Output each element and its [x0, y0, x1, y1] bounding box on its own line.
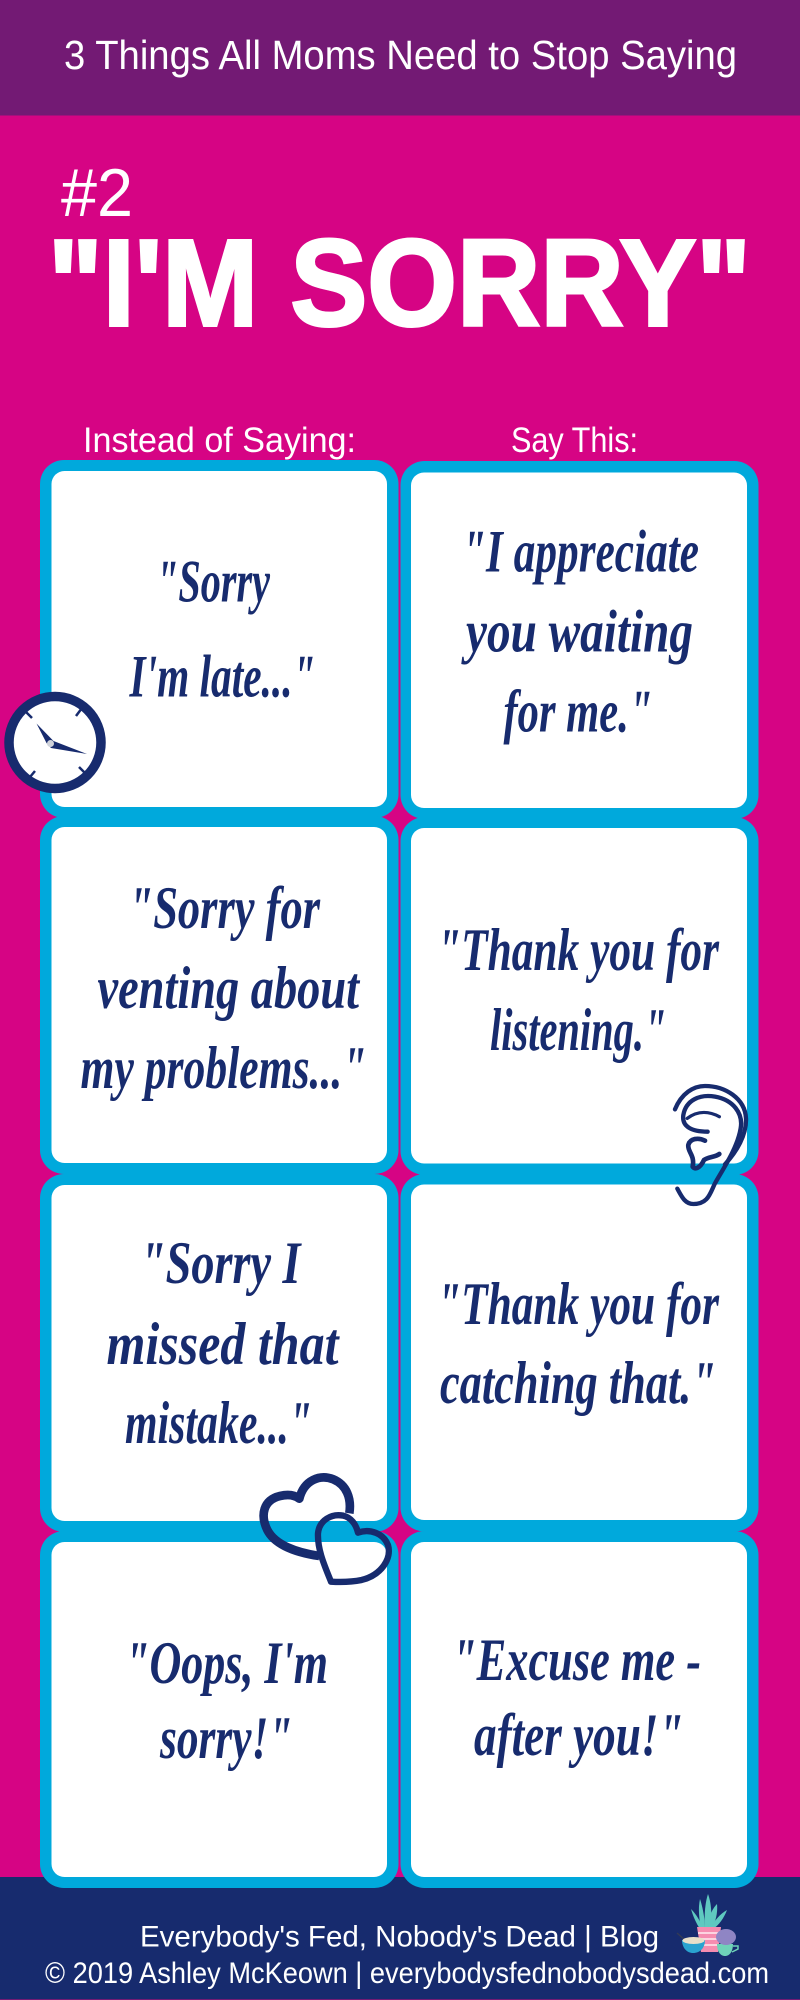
- icon: clock: [9, 696, 101, 788]
- column heading: instead of saying: Instead of Saying:: [83, 421, 356, 460]
- card: sorry for venting: "Sorry for: [128, 875, 320, 941]
- footer blog name: Everybody's Fed, Nobody's Dead | Blog: [140, 1920, 659, 1954]
- card: I appreciate you waiting for me: you waiting: [461, 598, 693, 664]
- card: excuse me after you: after you!": [474, 1702, 684, 1768]
- card: sorry I missed that mistake: [40, 1174, 398, 1532]
- card: thank you for listening: listening.": [490, 997, 666, 1063]
- pink pot: [697, 1927, 721, 1952]
- card: sorry I'm late: [40, 460, 398, 818]
- main heading: "I'M SORRY": [48, 216, 751, 352]
- front heart: [318, 1515, 389, 1582]
- card: sorry for venting: [40, 816, 398, 1174]
- card: sorry I'm late: "Sorry: [156, 548, 270, 614]
- teal cup with lavender: [717, 1944, 733, 1956]
- card: sorry I missed that mistake: mistake...": [125, 1390, 312, 1456]
- card: sorry for venting: my problems...": [80, 1035, 366, 1101]
- card: thank you for listening: [400, 817, 758, 1175]
- number label: #2: [61, 155, 133, 231]
- plant leaves: [691, 1894, 727, 1929]
- header band: [0, 0, 800, 116]
- spoon and bowl: [677, 1933, 686, 1941]
- column heading: say this: Say This:: [511, 421, 638, 460]
- card: I appreciate you waiting for me: [400, 461, 758, 819]
- card: sorry I'm late: I'm late...": [129, 644, 316, 710]
- card: sorry I missed that mistake: "Sorry I: [140, 1230, 303, 1296]
- card: excuse me after you: [400, 1531, 758, 1888]
- card: sorry I missed that mistake: missed that: [106, 1311, 340, 1377]
- card: excuse me after you: "Excuse me -: [452, 1627, 701, 1693]
- card: oops I'm sorry: "Oops, I'm: [125, 1630, 328, 1696]
- card: thank you for catching that: [400, 1174, 758, 1532]
- icon: ear: [675, 1086, 746, 1204]
- card: oops I'm sorry: [40, 1531, 398, 1888]
- icon: two hearts: [264, 1477, 389, 1582]
- card: I appreciate you waiting for me: for me.": [504, 678, 652, 744]
- back heart: [264, 1477, 350, 1556]
- card: I appreciate you waiting for me: "I appreciate: [462, 518, 699, 584]
- card: oops I'm sorry: sorry!": [159, 1705, 292, 1771]
- icon: plant, bowl and cup: [677, 1894, 738, 1956]
- card: sorry for venting: venting about: [98, 955, 361, 1021]
- footer band: [0, 1877, 800, 2000]
- header title: 3 Things All Moms Need to Stop Saying: [64, 32, 737, 78]
